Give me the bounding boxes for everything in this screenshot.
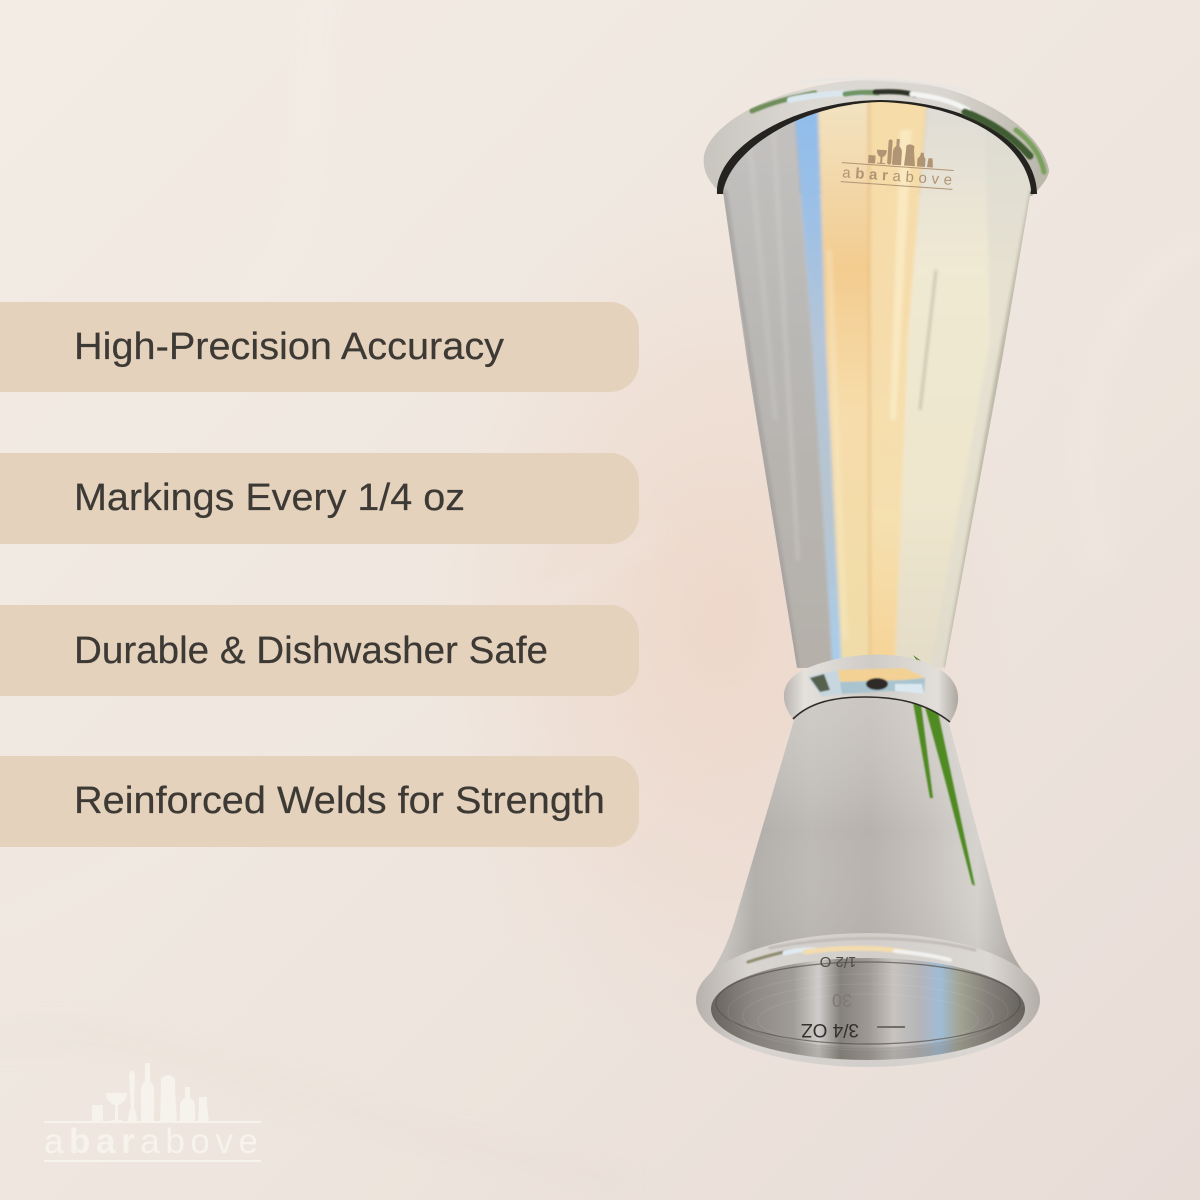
feature bar: Markings Every 1/4 oz: Markings Every 1/4 oz [74, 477, 465, 519]
engraved logo [841, 135, 956, 190]
wordmark: abarabove [44, 1122, 258, 1161]
engraved measures: 30 [832, 990, 852, 1010]
feature bar: Markings Every 1/4 oz [0, 453, 639, 544]
feature bar: Reinforced Welds for Strength [0, 756, 639, 847]
bottom rim and opening [696, 933, 1040, 1070]
engraved measures [801, 953, 905, 1040]
feature bar: Durable & Dishwasher Safe: Durable & Dishwasher Safe [74, 630, 548, 672]
upper cone body [723, 102, 1031, 668]
feature bar: Reinforced Welds for Strength: Reinforced Welds for Strength [74, 780, 605, 822]
jigger product illustration [696, 79, 1050, 1070]
feature bar: Durable & Dishwasher Safe [0, 605, 639, 696]
engraved logo: abarabove [842, 164, 953, 189]
upper cone rim [704, 79, 1049, 196]
feature bar: High-Precision Accuracy: High-Precision Accuracy [74, 326, 504, 368]
lower cone body [705, 693, 1030, 980]
engraved measures: 1/2 O [820, 953, 856, 970]
green reflections [913, 702, 975, 886]
centre collar [784, 655, 958, 722]
icon: bar skyline [92, 1063, 209, 1122]
feature bar: High-Precision Accuracy [0, 302, 639, 392]
engraved measures: 3/4 OZ [801, 1019, 859, 1040]
rim highlights [748, 938, 975, 962]
abarabove watermark logo [44, 1063, 261, 1162]
